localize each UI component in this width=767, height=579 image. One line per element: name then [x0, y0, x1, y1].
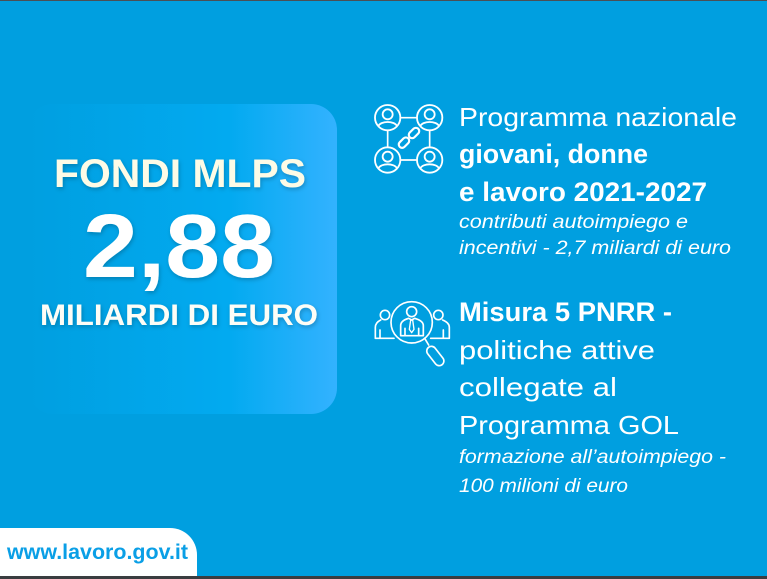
text block: Programma nazionale [459, 102, 737, 259]
text block: Programma nazionale: e lavoro 2021-2027 [459, 177, 707, 207]
website url: www.lavoro.gov.it [6, 541, 188, 564]
text block: Programma nazionale: giovani, donne [459, 139, 648, 169]
icon: magnifying glass over people [375, 302, 449, 368]
icon: linked people network [375, 105, 442, 173]
panel: fondi MLPS total [27, 104, 337, 414]
text block: Misura 5 PNRR [459, 297, 727, 497]
text block: Misura 5 PNRR: formazione all’autoimpiego - [459, 446, 727, 468]
text block: Programma nazionale: incentivi - 2,7 miliardi di euro [459, 237, 731, 259]
bottom edge bar [0, 576, 767, 579]
footer website tab [0, 528, 197, 576]
big number: 2,88: 2,88 [83, 197, 275, 297]
heading: FONDI MLPS: FONDI MLPS [54, 152, 306, 196]
text block: Misura 5 PNRR: Programma GOL [459, 410, 679, 440]
text block: Misura 5 PNRR: 100 milioni di euro [459, 475, 628, 497]
text block: Misura 5 PNRR: politiche attive [459, 335, 655, 365]
subheading: miliardi di euro: MILIARDI DI EURO [40, 299, 318, 332]
text block: Misura 5 PNRR: collegate al [459, 372, 617, 402]
text block: Programma nazionale: Programma nazionale [459, 102, 737, 132]
text block: Misura 5 PNRR: Misura 5 PNRR - [459, 297, 672, 327]
text block: Programma nazionale: contributi autoimpiego e [459, 211, 688, 233]
top edge bar [0, 0, 767, 1]
